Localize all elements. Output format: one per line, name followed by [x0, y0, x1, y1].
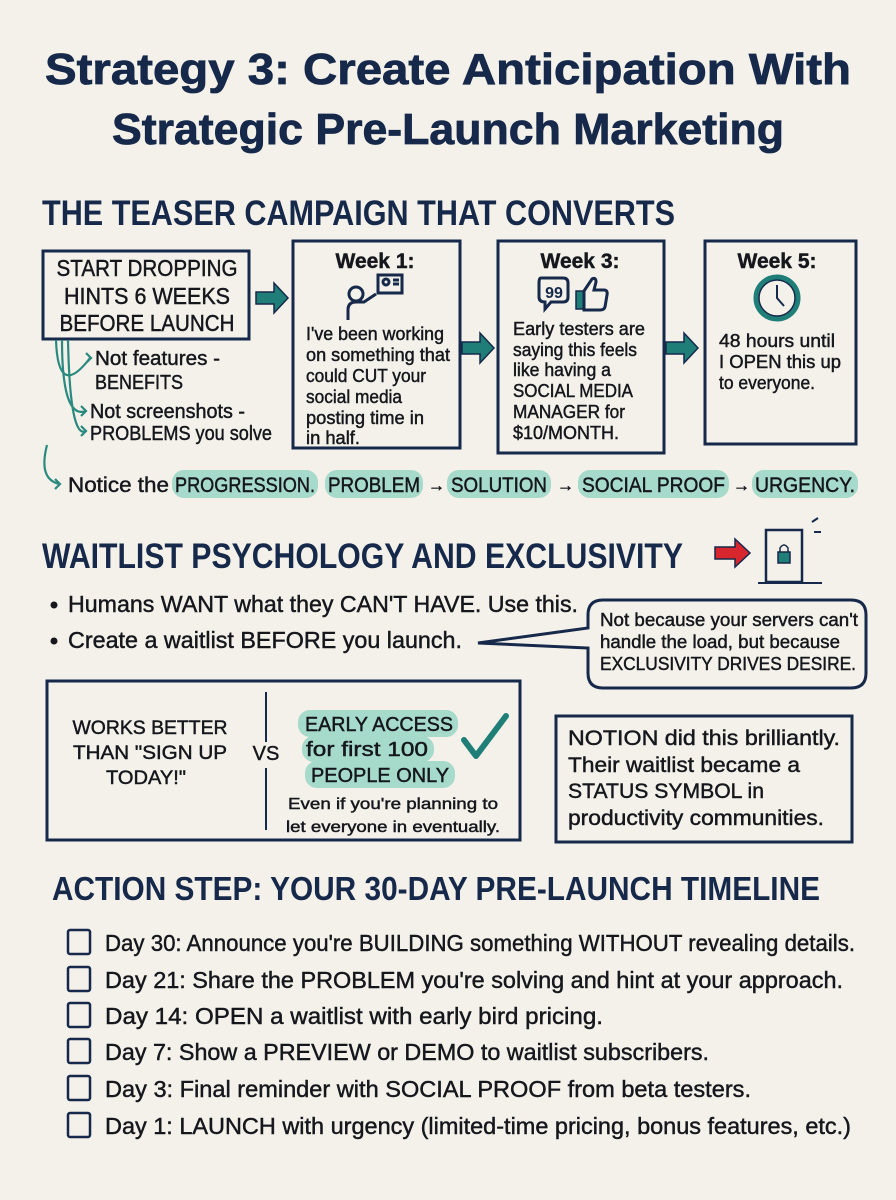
heading: waitlist: WAITLIST PSYCHOLOGY AND EXCLUSIVITY [42, 537, 683, 576]
checklist: Day 14: OPEN a waitlist with early bird pricing. [105, 1003, 603, 1029]
panel: week 3 [498, 241, 664, 453]
icon: locked door [758, 518, 822, 583]
panel: week 1: posting time in [306, 408, 424, 428]
panel: week 5 [705, 241, 856, 444]
callout: speech bubble [478, 600, 866, 688]
arrow 1 [256, 283, 288, 313]
panel: vs comparison: for first 100 [306, 739, 428, 761]
panel: vs comparison: VS [253, 743, 279, 765]
checklist: Day 1: LAUNCH with urgency (limited-time pricing, bonus features, etc.) [105, 1113, 851, 1139]
panel: week 5: Week 5: [738, 250, 816, 273]
title [45, 45, 851, 154]
panel: start dropping hints: HINTS 6 WEEKS [64, 283, 230, 309]
callout: speech bubble: Not because your servers can't [600, 610, 858, 630]
callout: speech bubble: EXCLUSIVITY DRIVES DESIRE. [600, 654, 856, 674]
connectors: teal branch lines [44, 340, 91, 489]
panel: week 1: could CUT your [306, 366, 426, 386]
checklist: Day 21: Share the PROBLEM you're solving and hint at your approach. [105, 967, 843, 993]
checklist [68, 930, 855, 1139]
panel: vs comparison: EARLY ACCESS [305, 714, 453, 736]
panel: notion example: NOTION did this brilliantly. [568, 727, 840, 750]
panel: start dropping hints: START DROPPING [56, 255, 238, 281]
panel: week 5: I OPEN this up [719, 352, 841, 372]
panel: week 5: to everyone. [719, 373, 815, 393]
bullets [50, 591, 578, 653]
panel: week 3: SOCIAL MEDIA [513, 381, 633, 401]
panel: week 3: Early testers are [513, 319, 645, 339]
panel: week 1: I've been working [306, 324, 444, 344]
progression line: → [733, 476, 750, 495]
progression line: PROGRESSION. [175, 474, 315, 497]
panel: week 1: social media [306, 387, 403, 407]
panel: vs comparison [47, 681, 520, 840]
panel: vs comparison: PEOPLE ONLY [311, 765, 449, 787]
icon: clock [756, 277, 798, 319]
progression line [68, 470, 858, 498]
panel: start dropping hints: BEFORE LAUNCH [60, 310, 234, 336]
panel: week 3: like having a [513, 360, 612, 380]
icon: presenter [348, 275, 402, 320]
title: Strategy 3: Create Anticipation With [45, 45, 851, 94]
panel: notion example [556, 716, 852, 842]
progression line: Notice the [68, 474, 169, 497]
panel: week 3: Week 3: [540, 250, 620, 273]
sub bullets: BENEFITS [95, 372, 183, 394]
panel: week 1: in half. [306, 428, 360, 448]
panel: notion example: Their waitlist became a [568, 754, 800, 777]
sub bullets: PROBLEMS you solve [90, 423, 272, 445]
panel: week 1: Week 1: [336, 250, 414, 273]
icon: checkmark [464, 716, 506, 756]
progression line: URGENCY. [755, 474, 855, 497]
panel: week 1: on something that [306, 345, 450, 365]
bullets: Create a waitlist BEFORE you launch. [68, 627, 462, 653]
checklist: Day 30: Announce you're BUILDING something WITHOUT revealing details. [105, 930, 855, 956]
progression line: → [428, 476, 445, 495]
panel: vs comparison: TODAY!" [106, 768, 186, 789]
panel: notion example: productivity communities. [568, 807, 824, 830]
arrow 3 [666, 333, 698, 363]
bullets: Humans WANT what they CAN'T HAVE. Use this. [68, 591, 578, 617]
arrow 2 [462, 333, 494, 363]
panel: week 5: 48 hours until [719, 331, 835, 351]
sub bullets: Not features - [95, 348, 220, 370]
icon: quote and thumbs up [539, 278, 607, 310]
heading: teaser campaign: THE TEASER CAMPAIGN THAT CONVERTS [42, 194, 675, 233]
progression line: SOLUTION [451, 474, 547, 497]
progression line: → [557, 476, 574, 495]
panel: week 3: $10/MONTH. [513, 423, 619, 443]
panel: vs comparison: Even if you're planning to [288, 796, 498, 813]
panel: start dropping hints [43, 251, 249, 339]
progression line: PROBLEM [328, 474, 420, 497]
heading: action step: ACTION STEP: YOUR 30-DAY PRE-LAUNCH TIMELINE [52, 870, 820, 907]
panel: vs comparison: WORKS BETTER [72, 718, 228, 739]
callout: speech bubble: handle the load, but because [600, 632, 840, 652]
progression line: SOCIAL PROOF [582, 474, 725, 497]
checklist: Day 7: Show a PREVIEW or DEMO to waitlist subscribers. [105, 1039, 709, 1065]
sub bullets: Not screenshots - [90, 401, 245, 423]
panel: vs comparison: THAN "SIGN UP [73, 743, 227, 764]
panel: vs comparison: let everyone in eventually. [286, 819, 500, 836]
panel: week 3: saying this feels [513, 340, 637, 360]
panel: week 1 [293, 241, 460, 448]
icon: red arrow [715, 539, 750, 567]
panel: week 3: MANAGER for [513, 402, 625, 422]
panel: notion example: STATUS SYMBOL in [568, 780, 764, 803]
icon: quote and thumbs up: 99 [545, 285, 563, 302]
checklist: Day 3: Final reminder with SOCIAL PROOF from beta testers. [105, 1076, 751, 1102]
sub bullets [90, 348, 272, 445]
title: Strategic Pre-Launch Marketing [112, 105, 784, 154]
